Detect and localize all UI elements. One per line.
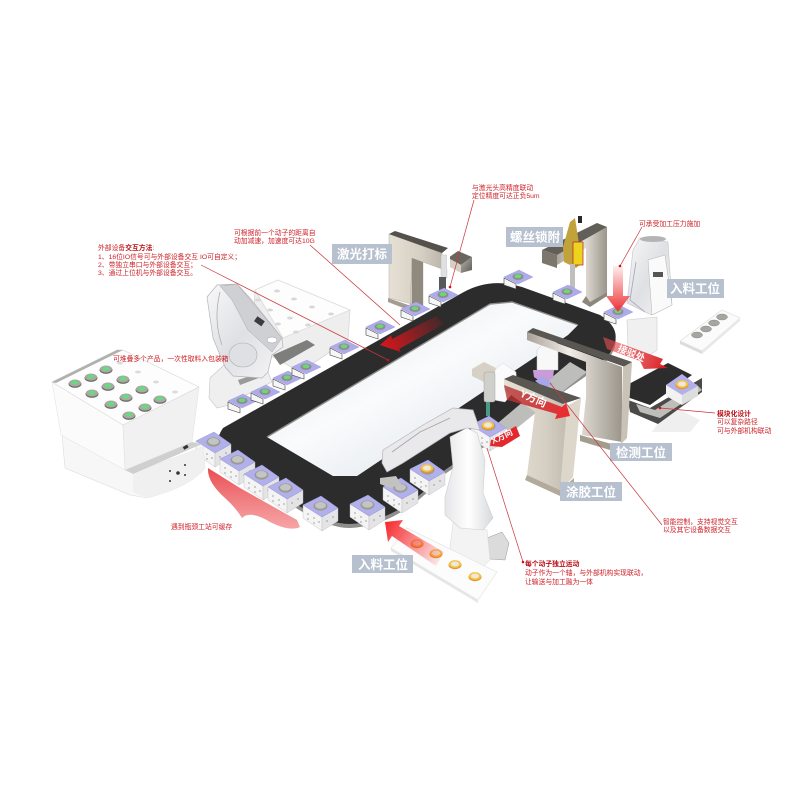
callout: laser precision: 与激光头高精度联动 bbox=[472, 183, 533, 192]
callout: independent movers bbox=[525, 559, 647, 586]
glass platform bbox=[267, 302, 578, 476]
callout: laser precision: 定位精度可达正负5um bbox=[472, 191, 540, 200]
rear gantry: laser marking bbox=[388, 231, 472, 311]
label: coating station bbox=[560, 482, 622, 501]
callout: exchange methods bbox=[98, 243, 241, 277]
label: inspection station bbox=[610, 443, 672, 461]
label: feed station bottom bbox=[352, 555, 413, 573]
callout: distance control: 动加减速，加速度可达10G bbox=[234, 236, 315, 245]
callout: independent movers: 让输送与加工融为一体 bbox=[525, 577, 593, 586]
left robot arm bbox=[207, 284, 315, 408]
callout: distance control: 可根据前一个动子的距离自 bbox=[234, 228, 316, 237]
callout: exchange methods: 1、16位IO信号可与外部设备交互 IO可自定义； bbox=[98, 252, 241, 261]
callout: smart control bbox=[663, 517, 738, 534]
arrow: Y direction bbox=[504, 385, 570, 419]
white storage box on AGV bbox=[52, 350, 205, 498]
inspection rail bbox=[492, 362, 587, 440]
callout: smart control: 以及其它设备数据交互 bbox=[663, 525, 731, 534]
branch conveyor module bbox=[627, 363, 702, 432]
label: inspection station: 检测工位 bbox=[616, 445, 666, 460]
callout: smart control: 智能控制，支持视觉交互 bbox=[663, 517, 738, 526]
callout: stacking: 可堆叠多个产品，一次性取料入包装箱 bbox=[113, 354, 229, 363]
bottom robot bbox=[380, 408, 509, 573]
bottom part tray bbox=[391, 528, 497, 603]
arrow label: X direction: X方向 bbox=[489, 427, 514, 446]
callout: exchange methods: 外部设备交互方法: bbox=[98, 243, 154, 252]
back storage box bbox=[252, 280, 350, 372]
branch mover bbox=[666, 374, 698, 405]
callout: modular design: 模块化设计 bbox=[717, 409, 751, 418]
leader lines bbox=[201, 200, 715, 563]
track and glass platform bbox=[218, 283, 616, 528]
arrow label: Y direction: Y方向 bbox=[518, 387, 549, 410]
dispensing head bbox=[472, 362, 517, 416]
callout: laser precision bbox=[472, 183, 540, 200]
callout: exchange methods: 3、通过上位机与外部设备交互。 bbox=[98, 268, 197, 277]
inspection station gantry bbox=[527, 328, 632, 453]
black conveyor bbox=[218, 283, 616, 524]
coating station gantry bbox=[504, 375, 581, 496]
arrow: laser travel direction bbox=[380, 316, 444, 352]
right robot bbox=[627, 236, 672, 357]
callout: independent movers: 动子作为一个轴，与外部机构实现联动， bbox=[525, 568, 647, 577]
callout: buffering: 遇到瓶颈工站可缓存 bbox=[171, 522, 232, 531]
callout: modular design bbox=[717, 409, 772, 435]
front mover with gold puck bbox=[471, 416, 506, 451]
label: screw locking bbox=[506, 227, 563, 247]
arrow: downward press force bbox=[606, 266, 630, 312]
label: laser marking bbox=[332, 244, 392, 264]
movers on front curve bbox=[196, 432, 445, 531]
arrow: X direction bbox=[490, 426, 520, 447]
label: feed station bottom: 入料工位 bbox=[358, 557, 408, 572]
callout: modular design: 可与外部机构联动 bbox=[717, 426, 772, 435]
callout: independent movers: 每个动子独立运动 bbox=[525, 559, 580, 568]
label: feed station right bbox=[667, 279, 724, 298]
callout: pressure: 可承受加工压力施加 bbox=[639, 219, 700, 228]
right part tray bbox=[680, 310, 740, 354]
label: coating station: 涂胶工位 bbox=[566, 484, 616, 500]
label: feed station right: 入料工位 bbox=[670, 281, 720, 296]
arrow label: transfer: 接驳处 bbox=[616, 343, 647, 365]
movers on rear track bbox=[228, 270, 633, 413]
rail rim bbox=[218, 287, 616, 528]
callout: modular design: 可以复杂路径 bbox=[717, 417, 758, 426]
label: screw locking: 螺丝锁附 bbox=[510, 230, 561, 244]
callout: distance control bbox=[234, 228, 316, 245]
rear gantry: screw locking bbox=[542, 216, 607, 307]
callout: exchange methods: 2、带独立串口与外部设备交互； bbox=[98, 260, 197, 269]
arrow: material feed bbox=[385, 520, 444, 566]
label: laser marking: 激光打标 bbox=[337, 246, 388, 262]
buffer highlight brace bbox=[208, 468, 300, 529]
arrow: transfer direction bbox=[603, 337, 668, 369]
